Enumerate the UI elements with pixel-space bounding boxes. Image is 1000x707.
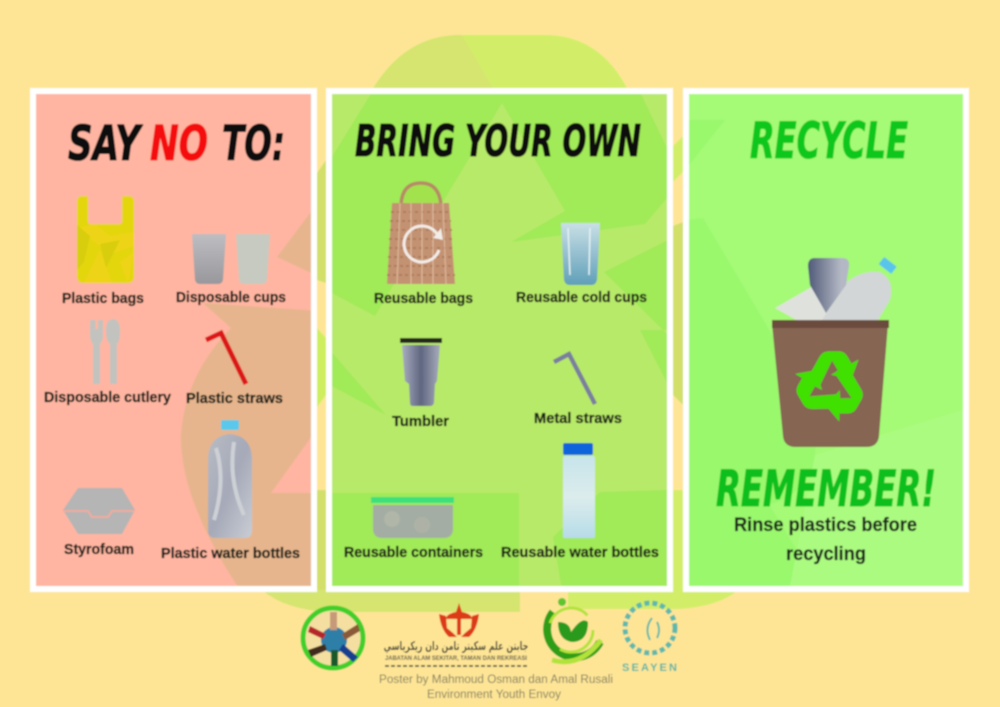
icon: plastic straw: [206, 333, 246, 384]
text: rinse note: Rinse plastics before: [734, 514, 917, 536]
label: Plastic water bottles: [161, 546, 300, 562]
title: TO:: [222, 116, 285, 172]
icon: styrofoam box: [63, 488, 135, 534]
icon: reusable cold cup: [561, 223, 600, 285]
background recycling symbol: [262, 35, 738, 612]
logo: youth hands globe: [303, 608, 363, 668]
panel: recycle: [683, 88, 969, 592]
icon: disposable cutlery: [90, 319, 120, 384]
title: BRING YOUR OWN: [355, 116, 641, 167]
icon: disposable cups: [192, 234, 270, 284]
icon: tumbler: [400, 338, 442, 406]
logo: brunei crest and department name: JABATAN ALAM SEKITAR, TAMAN DAN REKREASI: [385, 656, 527, 662]
icon: reusable bag: [387, 183, 455, 284]
panel background: [683, 88, 969, 592]
title: NO: [150, 116, 208, 172]
credit text: Poster by Mahmoud Osman dan Amal Rusali: [379, 674, 613, 686]
label: Metal straws: [534, 411, 622, 427]
label: Tumbler: [392, 414, 449, 430]
label: Reusable water bottles: [501, 545, 659, 561]
logo: leaf crescent: [547, 598, 601, 662]
icon: metal straw: [554, 354, 595, 404]
title: RECYCLE: [750, 112, 908, 170]
recycling arrows: [788, 351, 873, 426]
label: Plastic bags: [62, 291, 144, 307]
logo: seayen wreath: [622, 603, 677, 674]
bin body: [772, 324, 888, 447]
credit text: Environment Youth Envoy: [427, 689, 561, 701]
icon: plastic bag: [77, 196, 134, 283]
label: Reusable containers: [344, 545, 483, 561]
icon: reusable water bottle: [563, 443, 595, 538]
label: Disposable cutlery: [44, 390, 171, 406]
plastics in bin: [775, 257, 897, 322]
icon: plastic water bottle: [208, 420, 252, 538]
panel background: [30, 88, 320, 592]
label: Reusable bags: [374, 291, 473, 307]
panel: say no to: [30, 88, 320, 592]
icon: reusable container: [371, 497, 454, 538]
icon: recycling bin with plastics: [772, 257, 897, 447]
label: Reusable cold cups: [516, 290, 647, 306]
title: SAY: [68, 116, 143, 172]
panel background: [326, 88, 673, 592]
panel: bring your own: [326, 88, 673, 592]
label: Disposable cups: [176, 290, 286, 306]
logo: brunei crest and department name: [384, 603, 528, 666]
logo: seayen wreath: SEAYEN: [622, 662, 677, 674]
logo: brunei crest and department name: جابتن علم سکيتر تامن دان ريکرياسي: [384, 641, 528, 654]
text: rinse note: recycling: [786, 543, 866, 565]
label: Styrofoam: [64, 542, 134, 558]
label: Plastic straws: [186, 391, 283, 407]
